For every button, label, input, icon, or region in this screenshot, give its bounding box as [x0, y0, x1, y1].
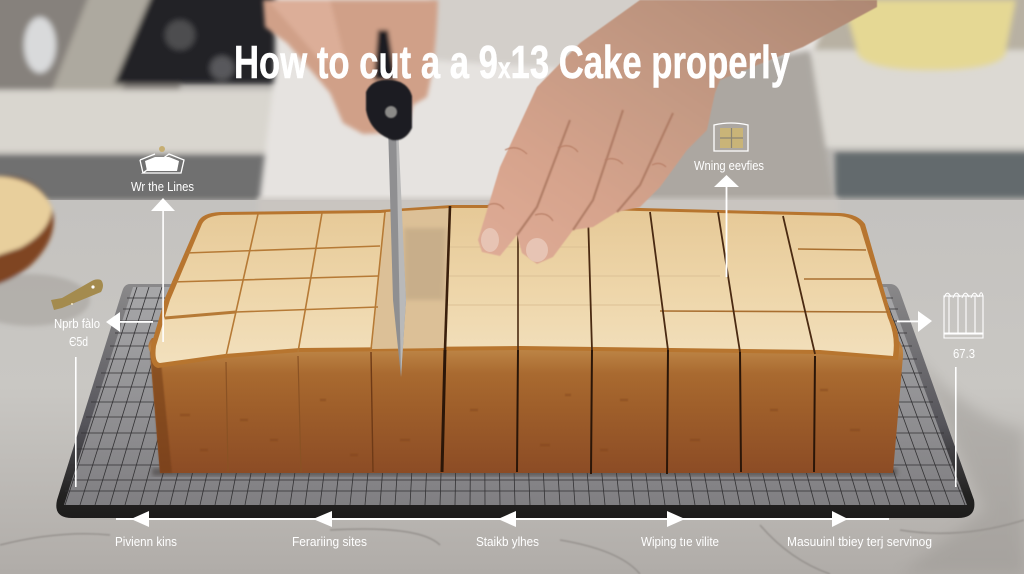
leader line right	[955, 367, 957, 487]
bottom label 4: Wiping tıe vilite	[641, 534, 719, 549]
timeline arrow with five markers	[116, 511, 889, 527]
cake	[148, 205, 903, 476]
icon: cake pan	[140, 146, 184, 173]
arrow: left	[106, 312, 153, 332]
slice being cut	[372, 208, 451, 349]
marble counter	[0, 198, 1024, 574]
right hand pressing the cake	[478, 0, 877, 264]
cooling rack	[56, 284, 974, 518]
label: left	[54, 316, 100, 349]
blurred cake slice at left	[0, 176, 90, 326]
leader line left	[75, 357, 77, 487]
arrow: up left	[151, 198, 175, 342]
dark left edge of cake	[150, 352, 172, 473]
icon: rack	[944, 293, 983, 338]
rack frame	[56, 284, 974, 518]
label: top left: Wr the Lines	[131, 179, 194, 194]
chef apron	[258, 0, 840, 212]
rack surface	[64, 287, 967, 505]
label: left: Є5d	[69, 334, 88, 349]
cake shadow	[152, 468, 897, 476]
title: How to cut a a 9x13 Cake properly	[234, 36, 790, 88]
label: right value: 67.3	[953, 346, 975, 361]
crumb texture	[180, 390, 860, 455]
knife handle	[366, 80, 412, 140]
arrow: up right	[714, 175, 739, 277]
bottom label 1: Pivienn kins	[115, 534, 177, 549]
label: left: Nprb fàlo	[54, 316, 100, 331]
bottom label 3: Staikb ylhes	[476, 534, 539, 549]
bottom label 2: Ferariing sites	[292, 534, 367, 549]
cake top surface	[151, 205, 899, 368]
left hand gripping knife	[263, 0, 438, 134]
knife blade	[388, 125, 406, 377]
dark cut lines	[226, 206, 815, 474]
icon: cake grid window	[714, 123, 748, 151]
top cut lines in golden crust colour	[165, 212, 888, 356]
knife	[366, 80, 412, 377]
label: top right: Wning eevfies	[694, 158, 764, 173]
bottom label 5: Masuuinl tbiey terj servinog	[787, 534, 932, 549]
cake front face	[148, 335, 903, 473]
rack wire grid	[65, 287, 965, 505]
yellow bowl	[843, 0, 1016, 70]
arrow: right	[897, 311, 932, 332]
icon: gold spatula	[51, 279, 103, 310]
